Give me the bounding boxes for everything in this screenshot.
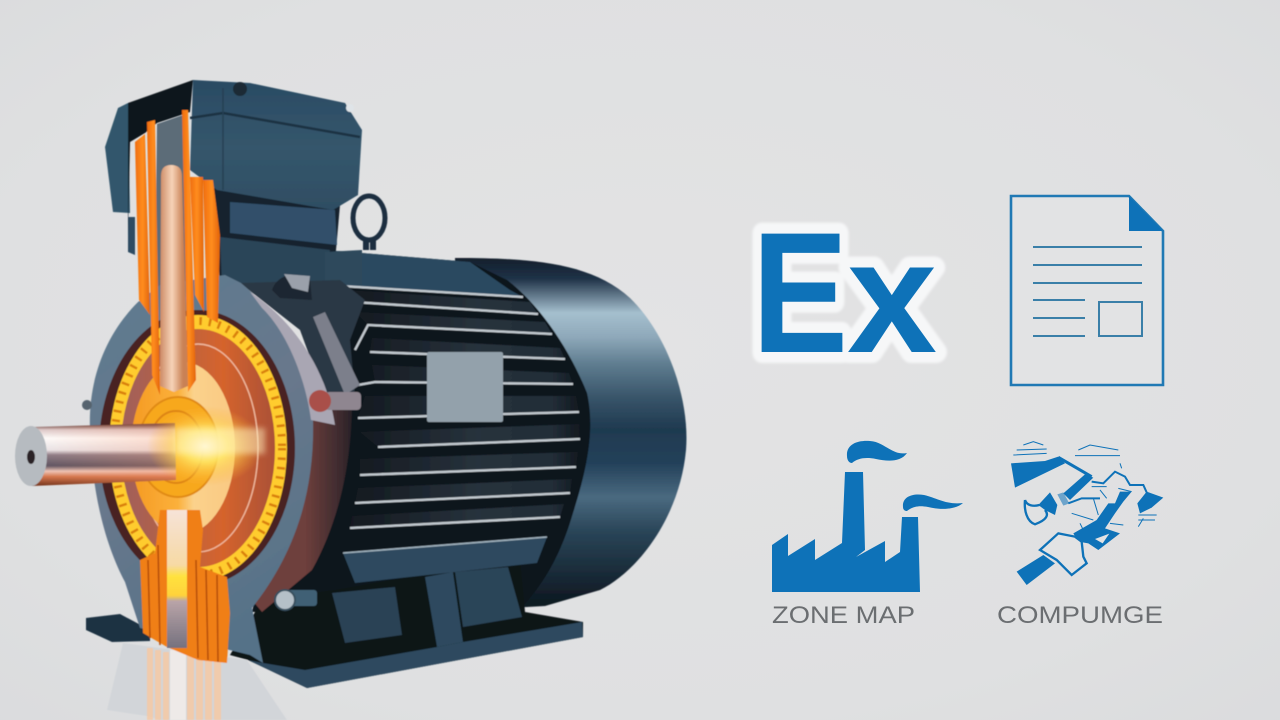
nameplate [427, 352, 503, 422]
output shaft [15, 423, 176, 486]
factory silhouette [772, 472, 920, 592]
fragmented shapes [1011, 442, 1163, 585]
cooling fins [322, 286, 580, 528]
open box interior [128, 80, 193, 235]
finned motor body [252, 250, 590, 612]
smoke plumes [847, 441, 963, 511]
shoulder behind flange [240, 280, 365, 612]
rotor and stator cutaway [99, 310, 295, 586]
illustration: explosion-proof motor cutaway [15, 80, 686, 720]
left mounting foot [86, 614, 150, 642]
Ex halo: E [752, 197, 848, 389]
copper conductor [160, 165, 188, 392]
icon: Ex mark [752, 197, 937, 389]
mounting base and support beam [230, 537, 583, 688]
icon: certificate document [1011, 196, 1163, 385]
flange bolts [82, 274, 361, 610]
stator winding ring [109, 315, 287, 581]
floor reflection [107, 643, 287, 720]
Ex letters: E [752, 197, 848, 389]
terminal box [105, 80, 362, 300]
body top surface [322, 250, 523, 297]
front end shield flange [90, 275, 313, 663]
Ex halo: x [847, 207, 937, 386]
lower conductor [167, 510, 187, 648]
zone map label: ZONE MAP [772, 602, 915, 629]
compliance label: COMPUMGE [997, 602, 1163, 629]
icon: compliance collage [997, 442, 1163, 629]
icon: factory zone map [772, 441, 963, 629]
flange highlight band [250, 292, 335, 425]
rotor core [131, 362, 235, 534]
upper cutaway windings [135, 110, 220, 395]
Ex letters [752, 197, 937, 389]
rear fan cover [455, 258, 686, 610]
Ex halo [752, 197, 937, 389]
lifting eye bolt [353, 196, 385, 250]
heat glow [147, 406, 265, 486]
lower cutaway windings [140, 510, 230, 663]
Ex letters: x [847, 207, 937, 386]
terminal box lid [190, 80, 362, 210]
